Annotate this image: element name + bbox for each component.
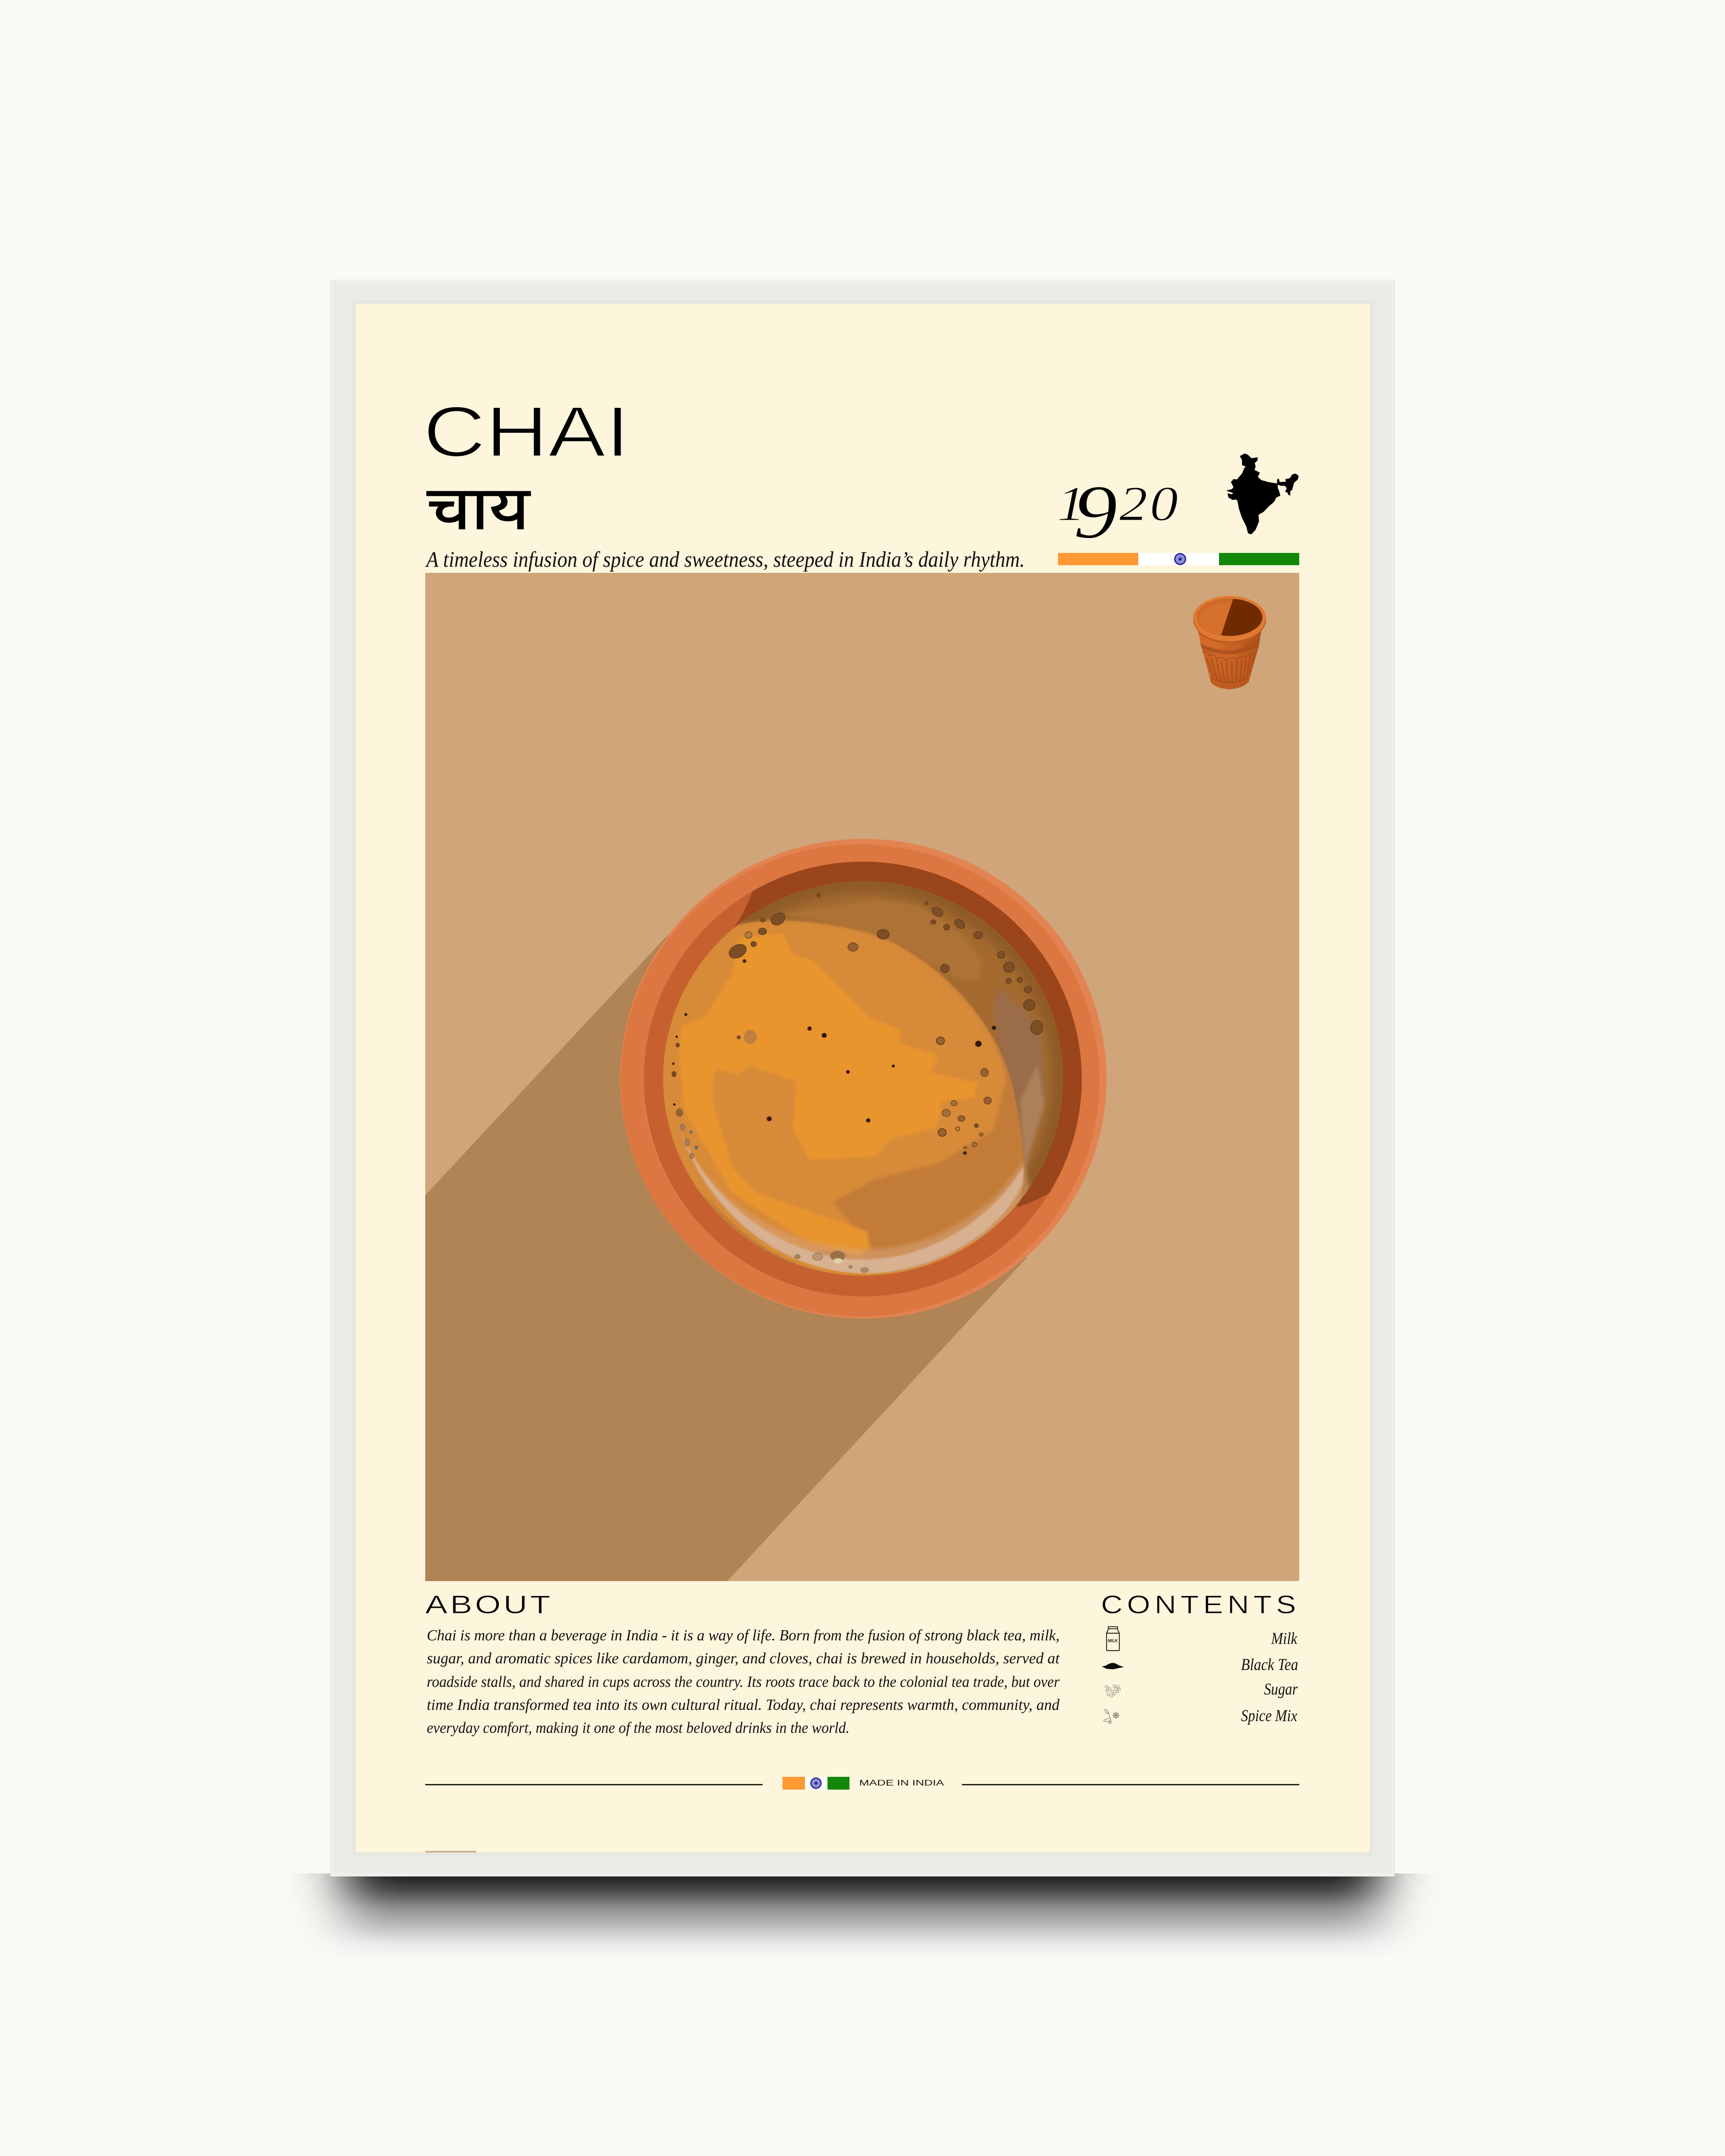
illustration panel bbox=[425, 573, 1299, 1581]
label: Milk: Milk bbox=[1271, 1630, 1298, 1648]
about paragraph: time India transformed tea into its own cultural ritual. Today, chai represents warmth, community, and bbox=[427, 1696, 1060, 1713]
year 1920: 2 bbox=[1119, 477, 1147, 531]
icon: sugar crystals bbox=[1105, 1685, 1120, 1697]
icon: spice mix bbox=[1103, 1709, 1119, 1724]
spice specks and bubbles bbox=[672, 894, 1043, 1273]
heading: CONTENTS: CONTENTS bbox=[1101, 1590, 1300, 1619]
title: Hindi: चाय bbox=[427, 475, 531, 554]
tagline: A timeless infusion of spice and sweetness, steeped in India’s daily rhythm. bbox=[425, 548, 1025, 572]
heading: ABOUT: ABOUT bbox=[425, 1590, 553, 1619]
label: Black Tea: Black Tea bbox=[1241, 1656, 1298, 1674]
contents list bbox=[1102, 1627, 1298, 1725]
made in india label: MADE IN INDIA bbox=[859, 1779, 944, 1788]
label: Sugar: Sugar bbox=[1264, 1680, 1298, 1699]
inner clay wall bbox=[644, 862, 1082, 1296]
long shadow of the bowl bbox=[425, 935, 1027, 1581]
about paragraph bbox=[427, 1626, 1060, 1736]
chai surface bbox=[637, 881, 1063, 1281]
icon: milk carton: MILK bbox=[1108, 1638, 1118, 1643]
footer badge bbox=[425, 1777, 1299, 1790]
kulhad cup bbox=[1193, 596, 1268, 689]
year 1920: 1 bbox=[1057, 477, 1085, 531]
about paragraph: roadside stalls, and shared in cups across the country. Its roots trace back to the colonial tea trade, but over bbox=[427, 1673, 1060, 1690]
bowl of chai, top view bbox=[620, 834, 1112, 1318]
year 1920: 0 bbox=[1150, 477, 1178, 531]
icon: milk carton bbox=[1107, 1627, 1119, 1651]
about paragraph: everyday comfort, making it one of the most beloved drinks in the world. bbox=[427, 1719, 849, 1736]
icon: black tea pile bbox=[1102, 1663, 1124, 1670]
drop shadow under the frame bbox=[345, 1870, 1380, 1958]
year 1920 bbox=[1057, 469, 1178, 554]
about paragraph: sugar, and aromatic spices like cardamom, ginger, and cloves, chai is brewed in households, served at bbox=[427, 1649, 1060, 1667]
year 1920: 9 bbox=[1073, 469, 1117, 554]
label: Spice Mix: Spice Mix bbox=[1241, 1707, 1297, 1725]
about paragraph: Chai is more than a beverage in India - it is a way of life. Born from the fusion of strong black tea, milk, bbox=[427, 1626, 1060, 1644]
white frame bbox=[330, 280, 1395, 1876]
title: CHAI: CHAI bbox=[423, 391, 630, 472]
clay rim bbox=[620, 839, 1107, 1318]
poster paper bbox=[356, 304, 1370, 1852]
icon: map of India bbox=[1226, 453, 1299, 535]
flag bar bbox=[1058, 553, 1299, 565]
cropped sliver at bottom edge bbox=[425, 1851, 477, 1852]
